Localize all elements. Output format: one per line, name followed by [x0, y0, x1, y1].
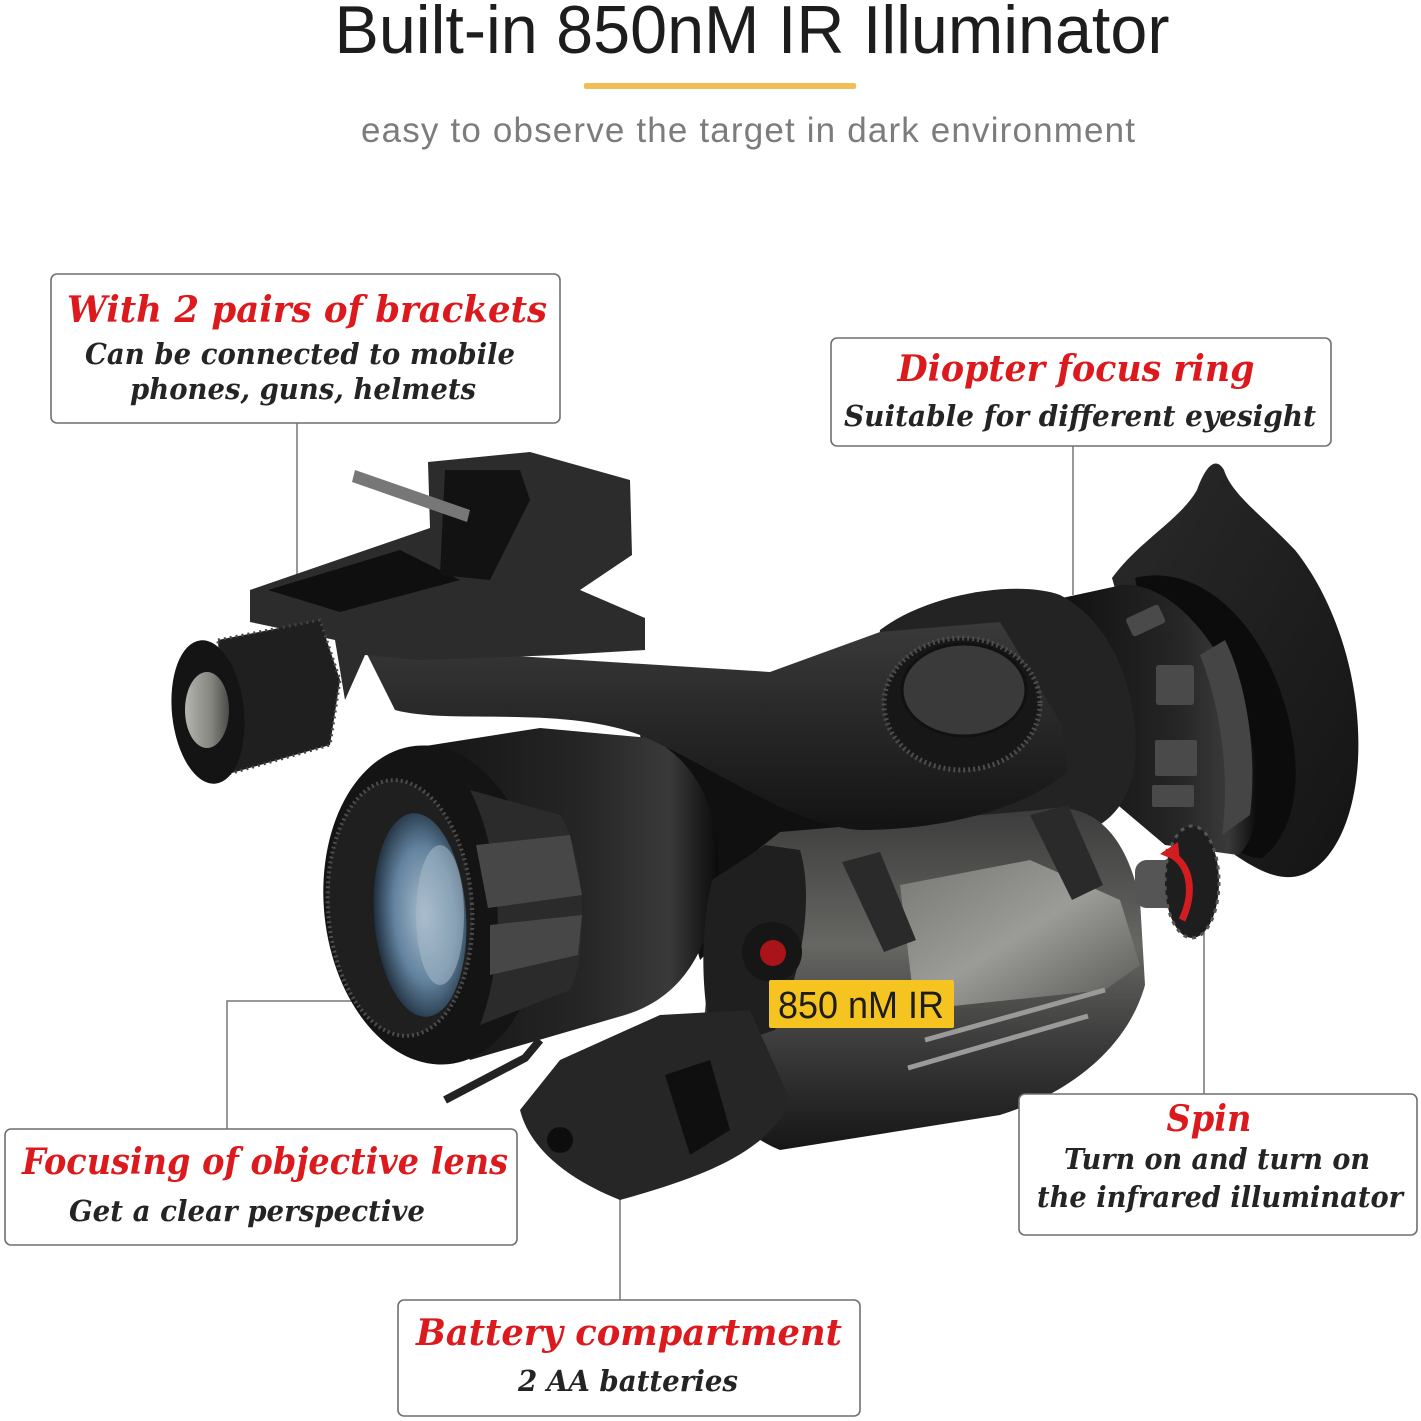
objective barrel: [390, 728, 719, 1060]
bracket mount: [250, 452, 645, 700]
callout: objective: [5, 1129, 517, 1245]
callout: brackets: With 2 pairs of brackets: [67, 289, 547, 331]
spin knob: [1135, 826, 1219, 938]
callout: spin: Turn on and turn on: [1064, 1142, 1370, 1176]
callout: objective: Focusing of objective lens: [21, 1141, 508, 1183]
main body: [704, 808, 1145, 1150]
dark fill behind barrel and body: [640, 735, 860, 960]
night vision device photo: [165, 452, 1358, 1200]
body rails: [842, 805, 1103, 952]
objective front ring: [308, 735, 582, 1075]
callout: objective: Get a clear perspective: [69, 1194, 425, 1228]
leader lines: [227, 423, 1204, 1300]
callout: spin: the infrared illuminator: [1037, 1180, 1406, 1214]
callout: brackets: Can be connected to mobile: [85, 337, 515, 371]
callout: diopter: [831, 338, 1331, 446]
callout: diopter: Suitable for different eyesight: [844, 399, 1317, 433]
body grooves: [908, 990, 1105, 1068]
bracket knob: [165, 620, 340, 787]
callout: brackets: [51, 274, 560, 423]
callout: battery: Battery compartment: [415, 1312, 842, 1354]
grey body panel: [900, 860, 1140, 1010]
label: 850 nM IR: 850 nM IR: [778, 985, 944, 1027]
callout: spin: Spin: [1166, 1098, 1252, 1140]
title underline: [584, 83, 856, 89]
eyepiece rear band: [1200, 640, 1252, 835]
IR emitter: [742, 922, 802, 982]
subtitle: easy to observe the target in dark environment: [361, 111, 1135, 150]
eyecup: [1112, 464, 1358, 877]
front face of body: [703, 845, 806, 1050]
callout: spin: [1019, 1094, 1417, 1235]
diopter ring ridges: [1125, 604, 1197, 807]
callout: battery: [398, 1300, 860, 1416]
callout: diopter: Diopter focus ring: [897, 348, 1254, 390]
dial on arm: [884, 638, 1040, 770]
battery compartment: [520, 1010, 790, 1200]
callout: battery: 2 AA batteries: [517, 1364, 738, 1398]
latch wire: [445, 1040, 540, 1100]
rear housing: [860, 589, 1136, 835]
eyepiece barrel: [1062, 585, 1257, 855]
callout: brackets: phones, guns, helmets: [130, 372, 476, 406]
mounting arm: [365, 622, 1068, 830]
